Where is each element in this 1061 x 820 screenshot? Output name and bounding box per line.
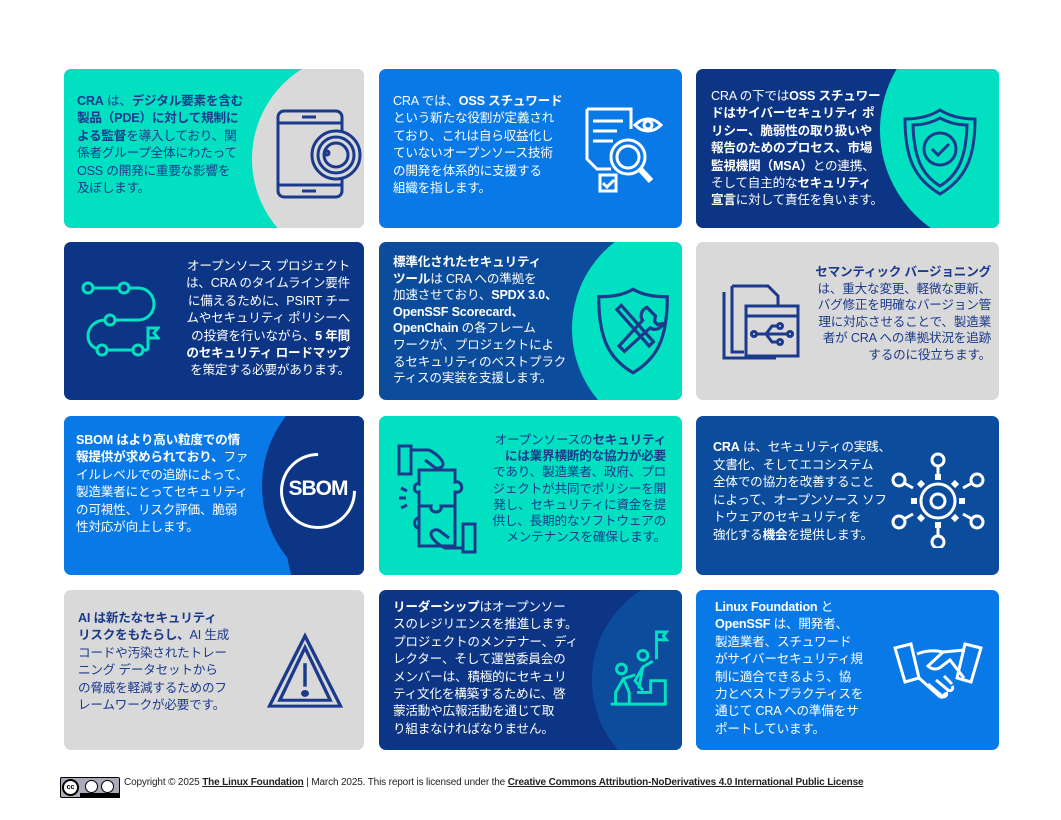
text block: [711, 89, 883, 207]
text block: CRA の下ではOSS スチュワー: [711, 89, 880, 103]
text block: の可視性、リスク評価、脆弱: [76, 503, 237, 517]
text block: 標準化されたセキュリティ: [393, 255, 541, 269]
text block: の投資を行いながら、5 年間: [191, 329, 350, 343]
panel: Linux Foundation and OpenSSF: [696, 590, 999, 750]
text block: [76, 433, 248, 534]
icon: climbers with flag: [610, 630, 670, 706]
text block: コードや汚染されたトレー: [78, 646, 227, 660]
text block: に備えるために、PSIRT チー: [188, 294, 350, 308]
icon: SBOM circle: [264, 437, 372, 545]
text block: レームワークが必要です。: [78, 698, 225, 712]
text block: ツールは CRA への準拠を: [393, 272, 536, 286]
icon: gear network: [892, 452, 984, 548]
text block: は、CRA のタイムライン要件: [186, 276, 350, 290]
icon: shield with tools: [597, 287, 669, 375]
panel: semantic versioning: [696, 242, 999, 400]
text block: には業界横断的な協力が必要: [505, 449, 666, 463]
text block: [713, 440, 891, 542]
text block: の開発を体系的に支援する: [393, 164, 542, 178]
text block: [186, 259, 350, 377]
panel: standardized security tools: [379, 242, 682, 400]
text block: するのに役立ちます。: [868, 348, 991, 362]
text block: 文書化、そしてエコシステム: [713, 458, 873, 472]
text block: SBOM はより高い粒度での情: [76, 433, 240, 447]
text block: OpenChain の各フレーム: [393, 321, 536, 335]
panel: cross-industry collaboration: [379, 416, 682, 575]
panel: CRA regulatory oversight: [64, 69, 364, 228]
text block: ワークが、プロジェクトによ: [393, 338, 554, 352]
text block: 製造業者、スチュワード: [715, 635, 851, 649]
text block: [815, 265, 991, 362]
text block: 性対応が向上します。: [76, 520, 199, 534]
text block: [393, 600, 578, 736]
text block: の脅威を軽減するためのフ: [78, 681, 227, 695]
text block: OpenSSF は、開発者、: [715, 617, 848, 631]
icon: document with magnifier: [586, 108, 663, 192]
text block: トウェアのセキュリティを: [713, 510, 861, 524]
text block: ムやセキュリティ ポリシーへ: [186, 311, 350, 325]
text block: ニング データセットから: [78, 663, 218, 677]
panel: CRA opportunity: [696, 416, 999, 575]
text block: は、重大な変更、軽微な更新、: [817, 282, 991, 296]
text block: 係者グループ全体にわたって: [77, 146, 237, 160]
text block: レクター、そして運営委員会の: [393, 652, 566, 666]
text block: [492, 433, 666, 544]
text block: という新たな役割が定義され: [393, 111, 554, 125]
panel: SBOM: [64, 416, 364, 575]
text block: るセキュリティのベストプラク: [393, 355, 566, 369]
text block: 及ぼします。: [77, 181, 150, 195]
icon: roadmap path: [82, 282, 160, 356]
text block: ていないオープンソース技術: [393, 146, 553, 160]
text block: AI は新たなセキュリティ: [78, 611, 217, 625]
text block: バグ修正を明確なバージョン管: [818, 298, 991, 312]
footer: license badge: cc: [67, 784, 74, 791]
text block: CRA では、OSS スチュワード: [393, 94, 562, 108]
text block: 製造業者にとってセキュリティ: [76, 485, 248, 499]
text block: よる監督を導入しており、関: [77, 129, 236, 143]
icon: shield check: [904, 108, 976, 196]
text block: [393, 255, 566, 385]
text block: CRA は、デジタル要素を含む: [77, 94, 243, 108]
text block: オープンソース プロジェクト: [187, 259, 350, 273]
text block: リスクをもたらし、AI 生成: [78, 628, 229, 642]
text block: のセキュリティ ロードマップ: [186, 346, 350, 360]
panel: five-year roadmap: [64, 242, 364, 400]
text block: プロジェクトのメンテナー、ディ: [393, 635, 578, 649]
text block: 通じて CRA への準備をサ: [715, 704, 858, 718]
text block: ポートしています。: [715, 722, 825, 736]
text block: ており、これは自ら収益化し: [393, 129, 553, 143]
text block: を策定する必要があります。: [190, 363, 350, 377]
text block: [77, 94, 243, 195]
panel: OSS steward: [379, 69, 682, 228]
text block: OSS の開発に重要な影響を: [77, 164, 230, 178]
text block: 組織を指します。: [393, 181, 491, 195]
text block: メンバーは、積極的にセキュリ: [393, 670, 567, 684]
text block: そして自主的なセキュリティ: [711, 176, 871, 190]
text block: 強化する機会を提供します。: [713, 528, 873, 542]
text block: 製品（PDE）に対して規制に: [77, 111, 238, 125]
text block: 力とベストプラクティスを: [715, 687, 863, 701]
text block: [393, 94, 562, 195]
text block: 発し、セキュリティに資金を提: [493, 498, 666, 512]
panel: OSS steward responsibilities: [696, 69, 999, 228]
text block: ジェクトが共同でポリシーを開: [492, 482, 666, 496]
footer: license badge: [60, 777, 120, 798]
text block: によって、オープンソース ソフ: [713, 493, 887, 507]
text block: CRA は、セキュリティの実践、: [713, 440, 891, 454]
text block: 加速させており、SPDX 3.0、: [393, 288, 557, 302]
text block: 制に適合できるよう、協: [715, 670, 851, 684]
icon: warning triangle: [266, 632, 344, 708]
text block: 報告のためのプロセス、市場: [711, 141, 872, 155]
text block: [715, 600, 863, 736]
text block: ティスの実装を支援します。: [393, 371, 552, 385]
text block: [78, 611, 229, 712]
text block: ドはサイバーセキュリティ ポ: [711, 106, 874, 120]
panel: AI risks: [64, 590, 364, 750]
text block: OpenSSF Scorecard、: [393, 305, 524, 319]
text block: リシー、脆弱性の取り扱いや: [711, 124, 872, 138]
footer: copyright text: Copyright © 2025 The Linux Foundation | March 2025. This report is licensed under the Creative Commons Attribution-NoDerivatives 4.0 International Public License: [124, 777, 863, 788]
text block: り組まなければなりません。: [393, 722, 554, 736]
text block: であり、製造業者、政府、プロ: [493, 465, 666, 479]
text block: 全体での協力を改善すること: [713, 475, 874, 489]
text block: 報提供が求められており、ファ: [76, 450, 248, 464]
text block: 監視機関（MSA）との連携、: [711, 159, 875, 173]
text block: メンテナンスを確保します。: [506, 530, 666, 544]
text block: リーダーシップはオープンソー: [393, 600, 566, 614]
text block: ティ文化を構築するために、啓: [393, 687, 565, 701]
icon: versioned documents: [722, 284, 800, 360]
icon: puzzle hands: [398, 444, 476, 554]
text block: オープンソースのセキュリティ: [495, 433, 666, 447]
text block: がサイバーセキュリティ規: [715, 652, 863, 666]
icon: handshake: [893, 642, 983, 699]
text block: 供し、長期的なソフトウェアの: [492, 514, 666, 528]
icon: phone: [276, 110, 362, 198]
text block: 理に対応させることで、製造業: [818, 315, 991, 329]
text block: 蒙活動や広報活動を通じて取: [393, 704, 554, 718]
text block: イルレベルでの追跡によって、: [76, 468, 248, 482]
text block: セマンティック バージョニング: [815, 265, 991, 279]
text block: 宣言に対して責任を負います。: [711, 193, 883, 207]
text block: 者が CRA への準拠状況を追跡: [823, 331, 991, 345]
panel: SBOM: SBOM: [288, 477, 348, 500]
panel: leadership: [379, 590, 682, 750]
text block: Linux Foundation と: [715, 600, 833, 614]
text block: スのレジリエンスを推進します。: [393, 617, 577, 631]
